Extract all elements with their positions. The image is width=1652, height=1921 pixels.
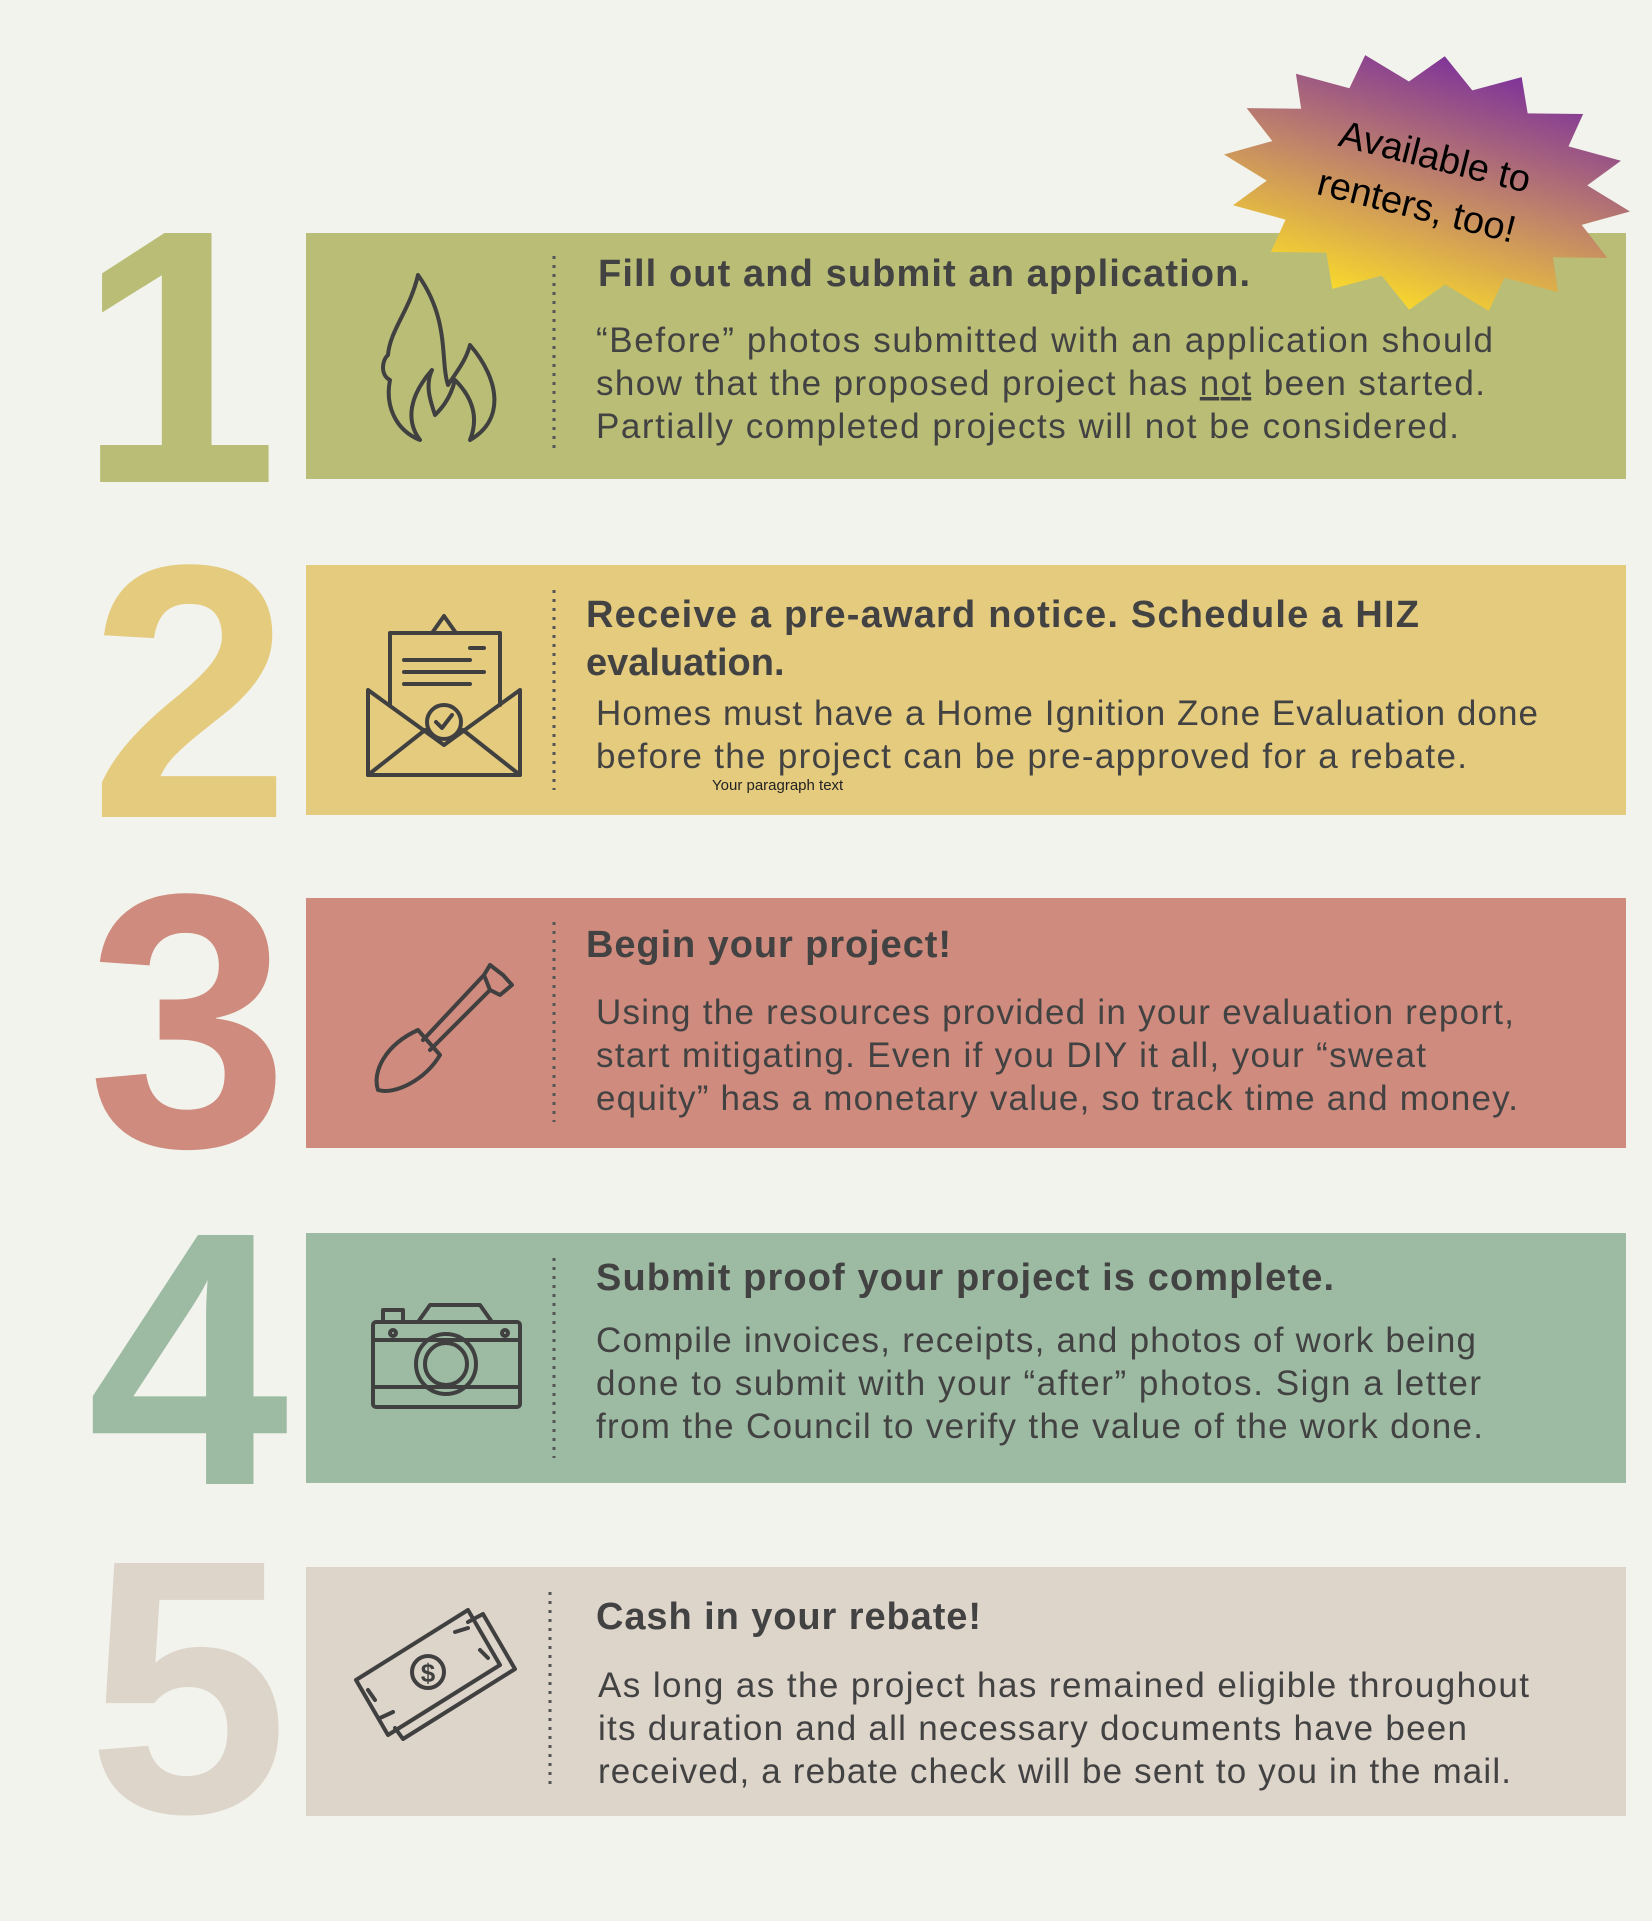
body text [596, 1321, 1483, 1446]
dotted divider [552, 1258, 556, 1458]
body text: from the Council to verify the value of the work done. [596, 1407, 1483, 1446]
body text [596, 694, 1538, 776]
panel: step 1 [306, 233, 1626, 479]
body text [596, 321, 1493, 446]
heading: evaluation. [586, 642, 784, 684]
panel: step 3 [306, 898, 1626, 1148]
icon: shovel [377, 965, 512, 1091]
icon: money [356, 1610, 515, 1739]
icon: money: $ [421, 1658, 436, 1688]
dotted divider [552, 922, 556, 1122]
heading: Fill out and submit an application. [598, 253, 1250, 295]
dotted divider [548, 1592, 552, 1790]
starburst callout: renters, too! [1313, 162, 1520, 251]
body text [596, 993, 1518, 1118]
body text: Compile invoices, receipts, and photos of work being [596, 1321, 1476, 1360]
body text: its duration and all necessary documents have been [598, 1709, 1467, 1748]
heading: Receive a pre-award notice. Schedule a HIZ [586, 594, 1419, 636]
heading: Cash in your rebate! [596, 1596, 981, 1638]
heading [586, 594, 1419, 684]
starburst callout [1206, 28, 1648, 338]
body text: “Before” photos submitted with an application should [596, 321, 1493, 360]
body text: before the project can be pre-approved for a rebate. [596, 737, 1467, 776]
step 2 [89, 489, 1626, 894]
body text [598, 1666, 1529, 1791]
body text: As long as the project has remained eligible throughout [598, 1666, 1529, 1705]
placeholder text: Your paragraph text [712, 777, 844, 794]
step 5 [87, 1484, 1626, 1889]
number 2: 2 [89, 489, 291, 894]
body text: Homes must have a Home Ignition Zone Evaluation done [596, 694, 1538, 733]
icon: camera [373, 1305, 520, 1407]
number 3: 3 [87, 818, 289, 1223]
dotted divider [552, 590, 556, 790]
step 4 [87, 1156, 1626, 1561]
body text: start mitigating. Even if you DIY it all, your “sweat [596, 1036, 1426, 1075]
step 1 [77, 154, 1626, 559]
body text: equity” has a monetary value, so track time and money. [596, 1079, 1518, 1118]
icon: flame [383, 275, 494, 440]
panel: step 5 [306, 1567, 1626, 1816]
starburst callout: Available to [1335, 114, 1535, 202]
icon: envelope [368, 616, 520, 775]
body text: Partially completed projects will not be considered. [596, 407, 1459, 446]
body text: Using the resources provided in your evaluation report, [596, 993, 1514, 1032]
number 5: 5 [87, 1484, 289, 1889]
body text: received, a rebate check will be sent to you in the mail. [598, 1752, 1511, 1791]
heading: Submit proof your project is complete. [596, 1257, 1334, 1299]
number 1: 1 [77, 154, 279, 559]
body text: done to submit with your “after” photos. Sign a letter [596, 1364, 1481, 1403]
number 4: 4 [87, 1156, 291, 1561]
panel: step 2 [306, 565, 1626, 815]
dotted divider [552, 256, 556, 451]
body text: show that the proposed project has not been started. [596, 364, 1485, 403]
heading: Begin your project! [586, 924, 951, 966]
panel: step 4 [306, 1233, 1626, 1483]
step 3 [87, 818, 1626, 1223]
